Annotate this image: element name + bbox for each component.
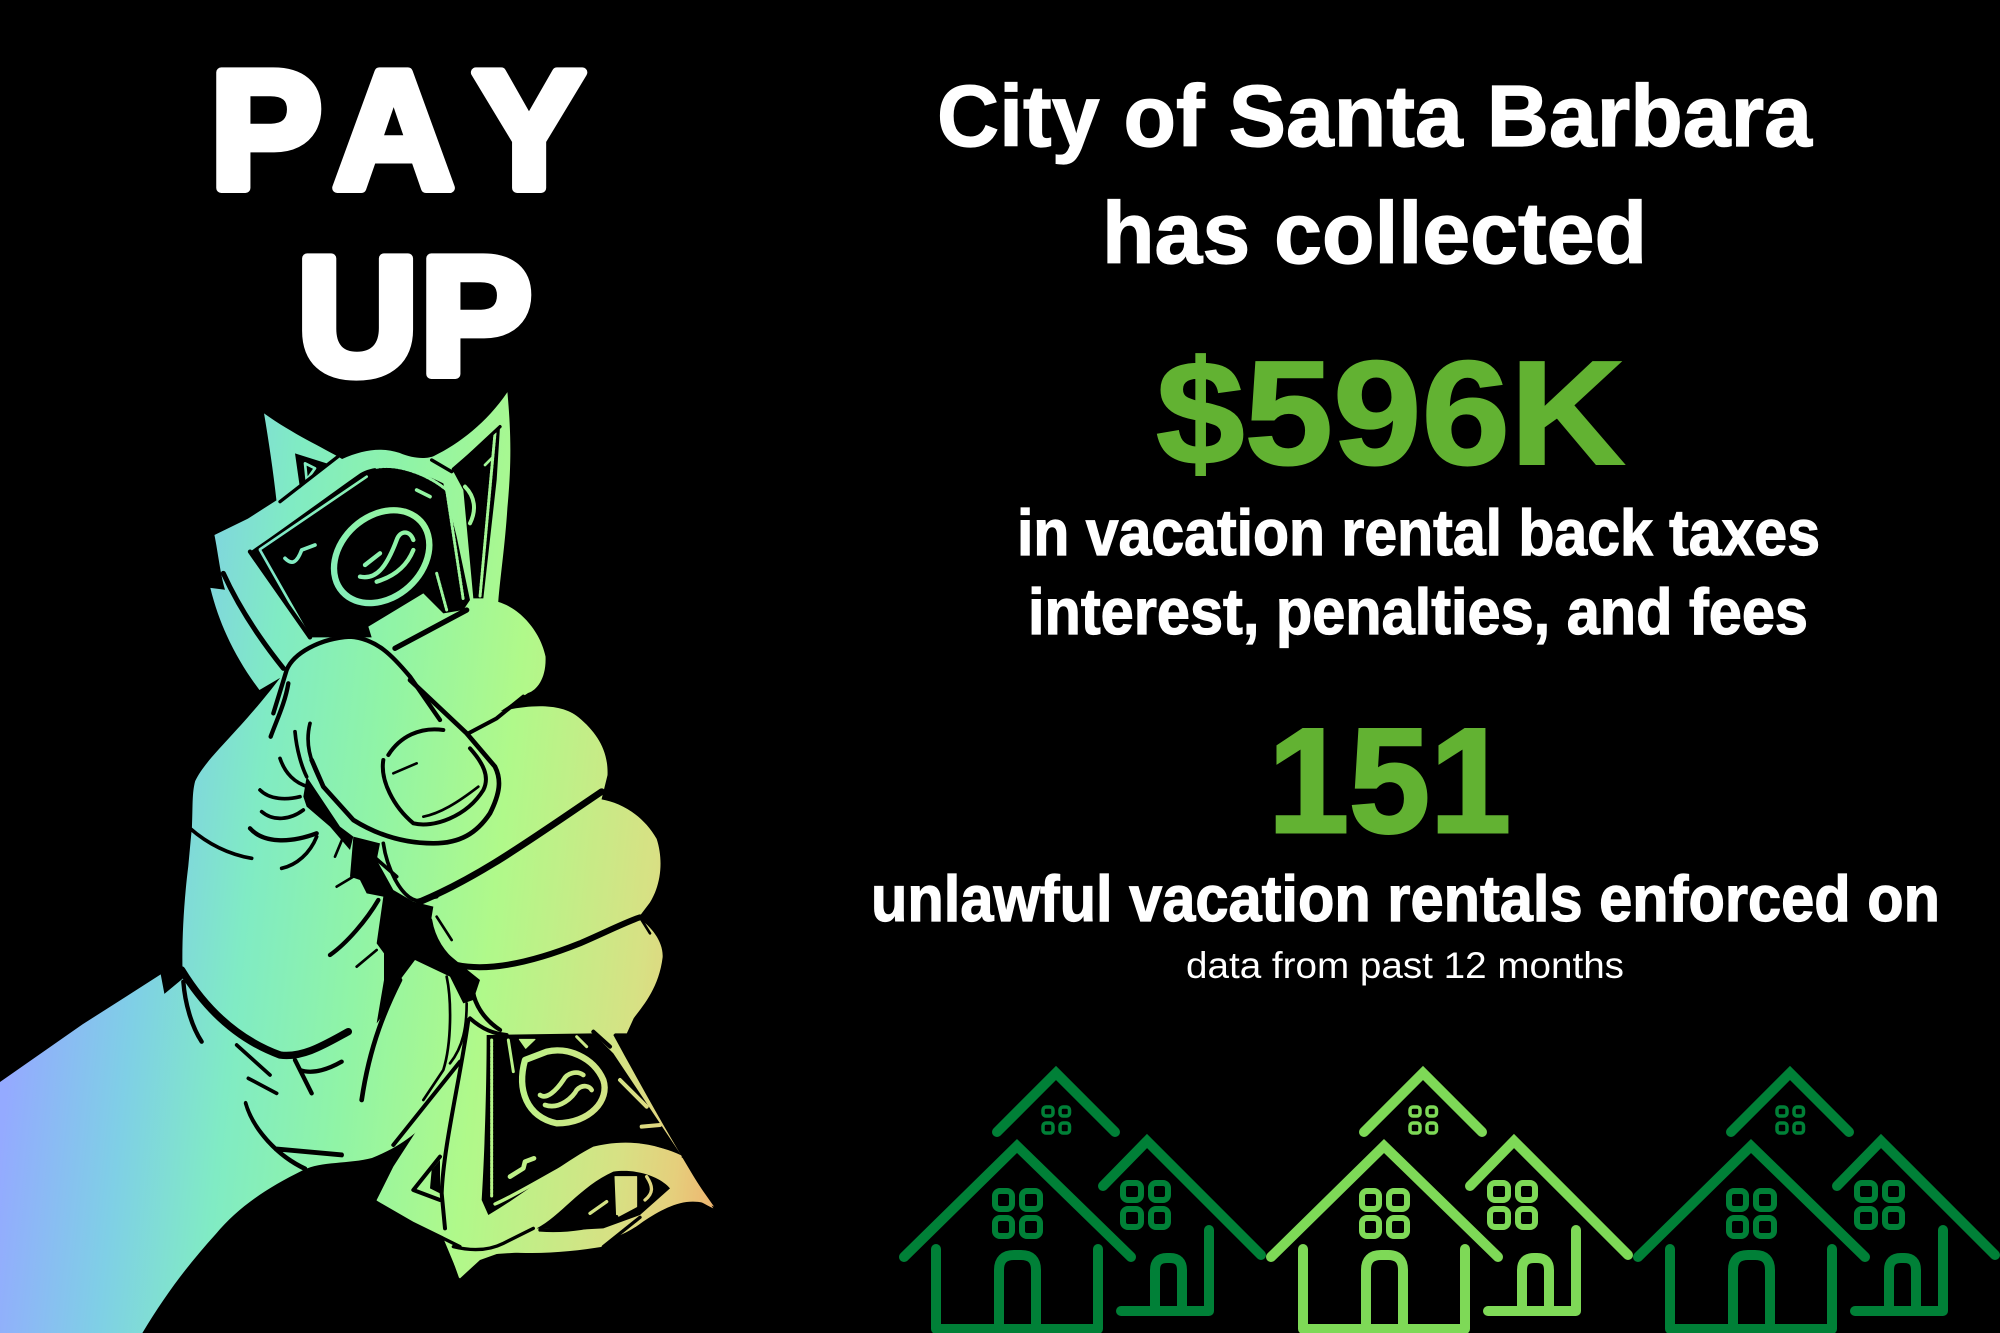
title: PAY UP: PAY — [210, 36, 585, 224]
heading: City of Santa Barbara has collected — [937, 68, 1813, 282]
description: back taxes: interest, penalties, and fees — [1028, 575, 1808, 648]
top bill details — [223, 427, 500, 720]
title: PAY UP: UP — [297, 222, 532, 410]
heading: City of Santa Barbara has collected: has collected — [1102, 185, 1647, 282]
title: PAY UP — [210, 36, 585, 410]
wrist cuff creases — [246, 1103, 342, 1169]
icon: dark green houses left — [904, 1073, 1261, 1329]
description: back taxes: in vacation rental back taxes — [1017, 496, 1820, 569]
hand silhouette — [0, 392, 714, 1333]
stat: 151: 151 — [1268, 697, 1511, 864]
illustration: fist clutching dollar bills — [0, 392, 714, 1333]
icon: dark green houses right — [1638, 1073, 1995, 1329]
icon: light green houses middle — [1271, 1073, 1628, 1329]
source note: data from past 12 months — [1186, 945, 1624, 986]
description: back taxes — [1017, 496, 1820, 648]
icon row: houses — [904, 1073, 1995, 1329]
bottom bill details — [377, 1013, 713, 1278]
stat: $596K: $596K — [1156, 331, 1625, 496]
fist creases, thumb and finger lines — [182, 680, 650, 1100]
heading: City of Santa Barbara has collected: City of Santa Barbara — [937, 68, 1813, 165]
